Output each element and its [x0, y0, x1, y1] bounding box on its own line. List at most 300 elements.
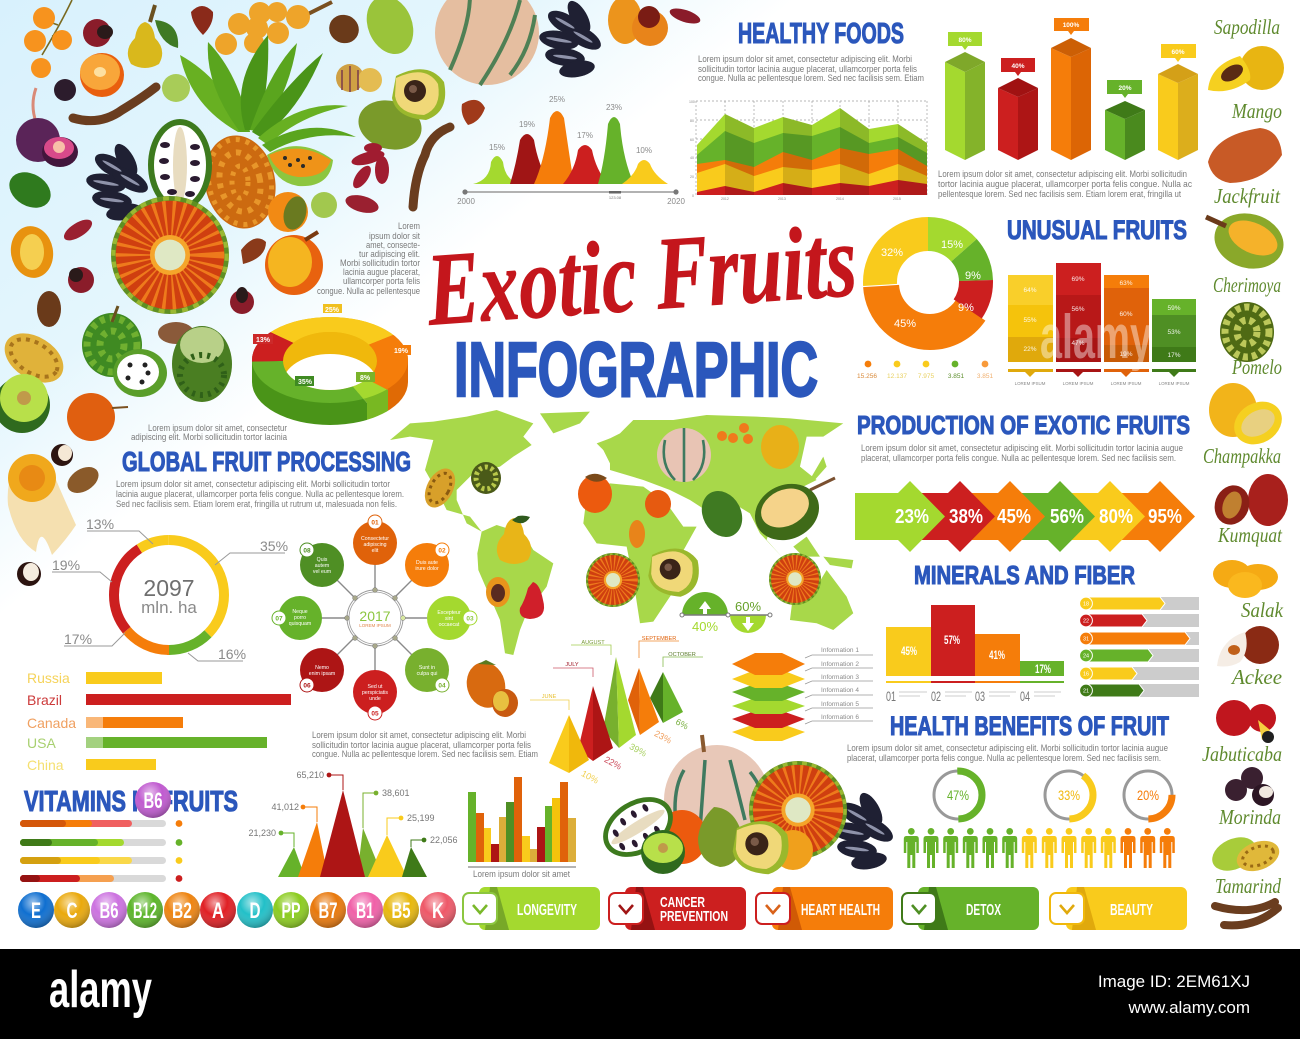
text: global fruit processing — [116, 479, 404, 510]
orange fruit — [773, 830, 813, 870]
lychee slice top — [668, 5, 702, 27]
chart: stacked area layers: 40 — [690, 156, 694, 160]
chart: minerals columns: 17% — [1035, 662, 1051, 676]
sapodilla fruit — [1208, 46, 1284, 91]
chart: 3D ring — [252, 304, 411, 425]
orange half small — [268, 192, 310, 232]
chart: 3D ring: 35% — [298, 379, 313, 386]
ball A: A — [212, 898, 224, 923]
node 06: enim ipsam — [309, 671, 335, 677]
chart: donut 2097 mln ha: 19% — [52, 557, 80, 573]
node 05: unde — [369, 696, 381, 702]
heading: vitamins in fruits: VITAMINS IN FRUITS — [24, 786, 238, 818]
icon: B6 vitamin ball — [135, 782, 171, 818]
chart: 40/60 arrows: 40% — [692, 619, 718, 634]
chart: country bars: Canada — [27, 715, 76, 731]
chart: minerals columns: 02 — [931, 688, 941, 704]
kola nut — [63, 462, 103, 498]
chart: production arrows: 23% — [895, 506, 929, 528]
chart: stacked columns: 55% — [1023, 317, 1037, 324]
donut labels and legend — [857, 239, 994, 380]
chart: fruit share donut — [880, 234, 979, 332]
date fruit — [37, 291, 61, 327]
node 03: sint — [445, 616, 454, 622]
chart: hexagon stack — [732, 653, 805, 741]
node 07: porro — [294, 615, 306, 621]
chart: stacked columns: LOREM IPSUM — [1159, 381, 1190, 386]
pineapple body — [196, 129, 284, 235]
green mango — [358, 0, 422, 61]
donut labels and legend: 45% — [894, 318, 916, 330]
chart: production arrows: 80% — [1099, 506, 1133, 528]
node 06 — [300, 648, 344, 692]
papaya half — [267, 146, 333, 186]
world map — [390, 410, 853, 655]
spiky soursop — [172, 326, 232, 402]
button: cancer prevention: PREVENTION — [660, 908, 728, 925]
heading: healthy foods: HEALTHY FOODS — [738, 18, 904, 50]
heading: unusual fruits: UNUSUAL FRUITS — [1007, 215, 1187, 245]
donut labels and legend: 12.137 — [887, 373, 907, 380]
pomelo fruit — [1209, 383, 1290, 453]
chart: pyramids with months: 23% — [653, 728, 673, 746]
chart: circular process 2017: LOREM IPSUM — [359, 623, 391, 628]
ball B12: B12 — [133, 898, 157, 923]
donut labels and legend: 9% — [965, 270, 981, 282]
text: global fruit processing: Sed nec facilisis sem. Etiam lorem erat, fringilla ut rutrum ut, malesuada non felis. — [116, 499, 397, 510]
node 04: culpa qui — [417, 671, 437, 677]
lychee lower — [230, 287, 254, 314]
chart: peak distribution 2000-2020: 23% — [606, 103, 622, 112]
cashew apple left — [7, 223, 57, 281]
salak mid — [241, 238, 266, 264]
gauge: 20 percent: 20% — [1137, 787, 1159, 803]
text: health benefits — [847, 743, 1168, 764]
persimmon — [657, 810, 707, 864]
text: health benefits: Lorem ipsum dolor sit amet, consectetur adipiscing elit. Morbi sollicitudin tortor lacinia augue — [847, 743, 1168, 754]
footer bar: Image ID: 2EM61XJ — [1098, 972, 1250, 991]
cherimoya fruit — [1220, 302, 1274, 362]
chart: stacked columns: LOREM IPSUM — [1015, 381, 1046, 386]
chart: country bars: Brazil — [27, 692, 62, 708]
pear with leaf — [128, 5, 178, 68]
chart: pyramids with months: 6% — [674, 717, 690, 731]
chart: pyramids with months: OCTOBER — [668, 652, 696, 658]
date — [324, 10, 364, 48]
heading: global fruit processing: GLOBAL FRUIT PROCESSING — [122, 446, 411, 477]
chart: production arrows: 45% — [997, 506, 1031, 528]
chart: stacked columns: 53% — [1167, 329, 1181, 336]
node 07: Neque — [292, 609, 308, 615]
green noni half — [0, 374, 50, 433]
ball B2 — [164, 892, 200, 928]
ball B2: B2 — [172, 898, 192, 923]
sapodilla on map — [486, 577, 510, 607]
green guava — [162, 74, 190, 102]
pineapple leaves — [180, 35, 356, 152]
node 01: 01 — [371, 520, 379, 526]
lime leaf fruit — [3, 165, 57, 215]
node 05 — [353, 670, 397, 720]
text: small block top left: ullamcorper porta felis — [343, 276, 420, 287]
orange berries cluster — [215, 2, 332, 55]
chart: mountain peaks with callouts: 38,601 — [382, 788, 410, 798]
red dates — [350, 143, 389, 191]
bar 80%: 80% — [958, 37, 972, 44]
footer bar: www.alamy.com — [1127, 998, 1250, 1017]
sapodilla label: Sapodilla — [1214, 15, 1280, 39]
chart: production arrows — [855, 481, 1195, 552]
ball B5: B5 — [392, 898, 410, 923]
bar 60%: 60% — [1171, 49, 1185, 56]
chart: peak distribution 2000-2020 — [457, 95, 685, 206]
node 08: 08 — [303, 548, 311, 554]
text: center block: congue. Nulla ac pellentesque lorem. Sed nec facilisis sem. Etiam — [312, 749, 538, 760]
ball PP — [273, 892, 309, 928]
orange half — [80, 53, 124, 97]
chart: peak distribution 2000-2020: 19% — [519, 120, 535, 129]
chart: vitamin progress bars — [20, 820, 182, 882]
node 04 — [405, 648, 449, 692]
chart: minerals columns — [886, 605, 1064, 704]
node 01: Consectetur — [361, 536, 389, 542]
node 05: Sed ut — [368, 684, 383, 690]
button: beauty — [1050, 887, 1187, 930]
ball K — [420, 892, 456, 928]
ball B6: B6 — [100, 898, 118, 923]
chart: peak distribution 2000-2020: 2000 — [457, 197, 475, 206]
node 01 — [353, 515, 397, 565]
chart: pyramids with months: JULY — [565, 662, 579, 668]
chart: minerals columns: 04 — [1020, 688, 1030, 704]
text: small block top left: amet, consecte- — [366, 240, 420, 251]
chart: minerals columns: 01 — [886, 688, 896, 704]
physalis — [8, 454, 76, 555]
chart: peak distribution 2000-2020: 17% — [577, 131, 593, 140]
text: production: Lorem ipsum dolor sit amet, consectetur adipiscing elit. Morbi sollicitudin tortor lacinia augue — [861, 443, 1183, 454]
chart: country bars: USA — [27, 735, 56, 751]
salak small — [191, 6, 213, 35]
tamarind pods — [1215, 902, 1278, 925]
node 05: 05 — [371, 710, 379, 718]
chart: stacked area layers: 80 — [690, 119, 694, 123]
chart: pyramids with months: 39% — [628, 741, 648, 759]
avocado on map — [648, 548, 699, 597]
text: small block top left: congue. Nulla ac pellentesque — [317, 286, 420, 297]
icon: B6 vitamin ball: B6 — [144, 788, 162, 813]
ackee fruit — [1216, 700, 1276, 743]
chart: mountain peaks with callouts: 22,056 — [430, 835, 458, 845]
ball E: E — [31, 898, 41, 923]
button: cancer prevention — [609, 887, 746, 930]
chart: chevron progress bars: 24 — [1083, 654, 1089, 660]
chart: mountain peaks with callouts: 41,012 — [271, 802, 299, 812]
soursop on map — [694, 484, 750, 544]
chart: production arrows: 56% — [1050, 506, 1084, 528]
chart: 3D bars top right — [945, 18, 1198, 160]
chart: stacked columns: 69% — [1071, 276, 1085, 283]
bar 20% — [1105, 80, 1145, 160]
gac on map left — [586, 553, 640, 607]
noni on map — [419, 463, 461, 513]
chart: chevron progress bars: 18 — [1083, 602, 1089, 608]
watermark over columns: alamy — [1040, 303, 1152, 372]
button: heart health — [756, 887, 893, 930]
chart: minerals columns: 41% — [989, 648, 1005, 662]
chart: minerals columns: 45% — [901, 644, 917, 658]
chart: stacked area layers: 2013 — [778, 197, 786, 201]
node 02 — [405, 543, 449, 587]
text: small block top left — [317, 221, 420, 297]
kumquat on map — [717, 423, 753, 444]
donut labels and legend: 9% — [958, 302, 974, 314]
custard apple — [82, 306, 142, 377]
text: below 3D bars: pellentesque lorem. Sed nec facilisis sem. Etiam lorem erat, fringilla ut — [938, 189, 1181, 200]
button: longevity — [463, 887, 600, 930]
gac on map right — [769, 553, 821, 605]
chart: circular process 2017 — [272, 515, 477, 720]
chart: mountain peaks with callouts — [248, 770, 458, 877]
node 08: vel eum — [313, 569, 331, 575]
text: small block top left: Lorem — [398, 221, 420, 232]
hexagon stack labels: Information 3 — [821, 674, 859, 681]
ball PP: PP — [282, 898, 300, 923]
node 02: Duis aute — [416, 560, 438, 566]
node 01: adipiscing — [363, 542, 387, 548]
text: global fruit processing: Lorem ipsum dolor sit amet, consectetur adipiscing elit. Morbi sollicitudin tortor — [116, 479, 390, 490]
chart: 3D ring: 13% — [256, 337, 271, 344]
persimmon on map — [578, 474, 612, 513]
ball B7 — [310, 892, 346, 928]
chart: peak distribution 2000-2020: 123.08 — [609, 195, 622, 200]
noni fruit — [1207, 831, 1283, 877]
chart: stacked columns: 60% — [1119, 311, 1133, 318]
ball B7: B7 — [318, 898, 338, 923]
ball K: K — [432, 898, 444, 923]
ball B1 — [347, 892, 383, 928]
hexagon stack labels — [805, 647, 873, 724]
chart: stacked area layers: 2015 — [893, 197, 901, 201]
footer bar: alamy — [49, 961, 152, 1019]
node 08: autem — [315, 563, 329, 569]
donut labels and legend: 32% — [881, 247, 903, 259]
node 02: 02 — [438, 548, 446, 554]
jabuticaba fruit — [1225, 767, 1274, 806]
ball D: D — [250, 898, 260, 923]
hexagon stack labels: Information 1 — [821, 647, 859, 654]
button: detox — [902, 887, 1039, 930]
cashew apple large — [265, 232, 323, 295]
bar 80% — [945, 32, 985, 160]
lychee slice left — [61, 216, 95, 244]
title: infographic: INFOGRAPHIC — [454, 327, 818, 413]
chart: colored bars — [468, 777, 576, 880]
chart: 3D ring: 25% — [325, 307, 340, 314]
pomelo label: Pomelo — [1231, 355, 1282, 379]
chart: pyramids with months: JUNE — [542, 694, 557, 700]
orange pear on map — [645, 490, 671, 518]
people pictogram row — [904, 828, 1175, 868]
chart: stacked area layers: 2014 — [836, 197, 844, 201]
chart: minerals columns: 03 — [975, 688, 985, 704]
coconut small — [17, 562, 41, 586]
text: below 3D bars: tortor lacinia augue placerat, ullamcorper porta felis congue. Nulla ac — [938, 179, 1192, 190]
chart: country bars: Russia — [27, 670, 70, 686]
heading: production of exotic fruits: PRODUCTION OF EXOTIC FRUITS — [857, 410, 1190, 440]
footer bar — [0, 949, 1300, 1039]
salak half — [462, 100, 485, 125]
mango label: Mango — [1231, 99, 1282, 123]
morinda label: Morinda — [1218, 805, 1281, 829]
text: production — [861, 443, 1183, 464]
ball E — [18, 892, 54, 928]
chart: 3D ring: 8% — [360, 375, 371, 382]
soursop half — [148, 119, 212, 211]
bar 40% — [998, 58, 1038, 160]
ball B12 — [127, 892, 163, 928]
chart: donut 2097 mln ha: 35% — [260, 538, 288, 554]
button: cancer prevention: CANCER — [660, 894, 705, 911]
chart: production arrows: 38% — [949, 506, 983, 528]
node 03 — [427, 596, 477, 640]
small orange on map — [629, 520, 645, 548]
text: below 3D bars: Lorem ipsum dolor sit amet, consectetur adipiscing elit. Morbi sollicitudin — [938, 169, 1187, 180]
node 04: 04 — [438, 682, 446, 690]
chart: donut 2097 mln ha: 2097 — [143, 575, 195, 601]
ball C: C — [66, 898, 78, 923]
chart: donut 2097 mln ha: mln. ha — [141, 598, 197, 617]
chart: peak distribution 2000-2020: 15% — [489, 143, 505, 152]
ball C — [54, 892, 90, 928]
text: healthy foods — [698, 54, 924, 84]
chart: stacked columns: 47% — [1071, 340, 1085, 347]
node 04: Sunt in — [419, 665, 435, 671]
yellow fruit on map — [761, 425, 799, 469]
chart: country bars: China — [27, 757, 64, 773]
ball B6 — [91, 892, 127, 928]
chart: stacked columns: 19% — [1119, 351, 1133, 358]
donut labels and legend: 15% — [941, 239, 963, 251]
chart: chevron progress bars: 21 — [1083, 688, 1089, 694]
text: caption below ring — [131, 423, 288, 443]
donut labels and legend: 7.975 — [918, 373, 935, 380]
chart: stacked area layers: 2012 — [721, 197, 729, 201]
chart: peak distribution 2000-2020: 10% — [636, 146, 652, 155]
button: longevity: LONGEVITY — [517, 902, 577, 919]
node 03: 03 — [466, 616, 474, 622]
salak label: Salak — [1241, 598, 1284, 622]
chart: stacked area layers: 60 — [690, 138, 694, 142]
right column: fruit names and pictures — [1202, 15, 1290, 925]
vitamin balls row — [18, 892, 456, 928]
text: production: placerat, ullamcorper porta felis congue. Nulla ac pellentesque lorem. Sed nec facilisis sem. — [861, 453, 1176, 464]
gauge: 47 percent — [934, 771, 982, 819]
cantaloupe top — [435, 0, 539, 85]
map fruits — [419, 423, 835, 619]
chart: chevron progress bars: 22 — [1083, 618, 1089, 624]
cantaloupe on map — [657, 428, 711, 482]
heading: health benefits: HEALTH BENEFITS OF FRUIT — [890, 711, 1169, 741]
pear on map — [497, 516, 531, 564]
chart: country bars — [27, 670, 291, 773]
jabuticaba brown — [158, 322, 194, 344]
noni yellow — [0, 323, 72, 393]
guava small — [311, 192, 337, 218]
gauge: 33 percent — [1045, 771, 1093, 819]
dark berry — [54, 79, 76, 101]
tamarind pod — [73, 87, 156, 121]
gauge: 33 percent: 33% — [1058, 787, 1080, 803]
node 02: irure dolor — [415, 566, 439, 572]
chart: minerals columns: 57% — [944, 633, 960, 647]
title: exotic fruits: Exotic Fruits — [422, 203, 860, 348]
chart: pyramids with months: SEPTEMBER — [642, 636, 676, 642]
soursop half — [592, 785, 684, 869]
chart: pyramids with months — [530, 636, 703, 786]
persimmon pair — [462, 658, 518, 717]
text: healthy foods: sollicitudin tortor lacinia augue placerat, ullamcorper porta felis — [698, 64, 917, 75]
fruit collage: top left — [0, 0, 450, 586]
donut labels and legend: 3.851 — [948, 373, 965, 380]
grapes — [830, 789, 897, 872]
node 07: quisquam — [289, 621, 311, 627]
text: center block: Lorem ipsum dolor sit amet, consectetur adipiscing elit. Morbi — [312, 730, 526, 741]
hexagon stack labels: Information 4 — [821, 687, 859, 694]
chart: donut 2097 mln ha — [52, 516, 288, 662]
chart: mountain peaks with callouts: 21,230 — [248, 828, 276, 838]
bar 60% — [1158, 44, 1198, 160]
chart: stacked columns: 56% — [1071, 306, 1085, 313]
chart: circular process 2017: 2017 — [359, 608, 391, 624]
lychee slice — [344, 192, 380, 216]
sapodilla halves — [353, 69, 445, 156]
hexagon stack labels: Information 5 — [821, 701, 859, 708]
chart: donut 2097 mln ha: 16% — [218, 646, 246, 662]
node 06: Nemo — [315, 665, 329, 671]
gauge: 20 percent — [1124, 771, 1172, 819]
chart: stacked columns — [1008, 263, 1196, 386]
chart: stacked area layers — [689, 100, 927, 201]
coconut half — [51, 444, 73, 466]
jabuticaba label: Jabuticaba — [1202, 742, 1282, 766]
bar 40%: 40% — [1011, 63, 1025, 70]
text: center block: sollicitudin tortor lacinia augue placerat, ullamcorper porta felis — [312, 740, 531, 751]
chart: stacked columns: 63% — [1119, 280, 1133, 287]
mangosteen — [16, 88, 78, 167]
kumquat label: Kumquat — [1217, 523, 1283, 547]
chart: pyramids with months: AUGUST — [581, 640, 605, 646]
kumquat fruit — [1213, 560, 1278, 598]
chart: pyramids with months: 10% — [580, 768, 600, 786]
chart: stacked columns: LOREM IPSUM — [1063, 381, 1094, 386]
chart: stacked columns: LOREM IPSUM — [1111, 381, 1142, 386]
black grapes top — [538, 0, 605, 80]
mango fruit — [1208, 128, 1282, 183]
text: small block top left: ipsum dolor sit — [369, 231, 420, 242]
jackfruit label: Jackfruit — [1214, 184, 1281, 208]
text: health benefits: placerat, ullamcorper porta felis congue. Nulla ac pellentesque lorem. Sed nec facilisis sem. — [847, 753, 1161, 764]
donut labels and legend: 15.256 — [857, 373, 877, 380]
node 06: 06 — [303, 682, 311, 690]
chart: 3D ring: 19% — [394, 348, 409, 355]
lychee dark — [68, 267, 94, 293]
node 08: Quis — [317, 557, 328, 563]
text: small block top left: Morbi sollicitudin tortor — [340, 258, 420, 269]
button: heart health: HEART HEALTH — [801, 902, 880, 919]
chart: stacked columns: 59% — [1167, 305, 1181, 312]
chart: pyramids with months: 22% — [603, 754, 623, 772]
chart: production arrows: 95% — [1148, 506, 1182, 528]
